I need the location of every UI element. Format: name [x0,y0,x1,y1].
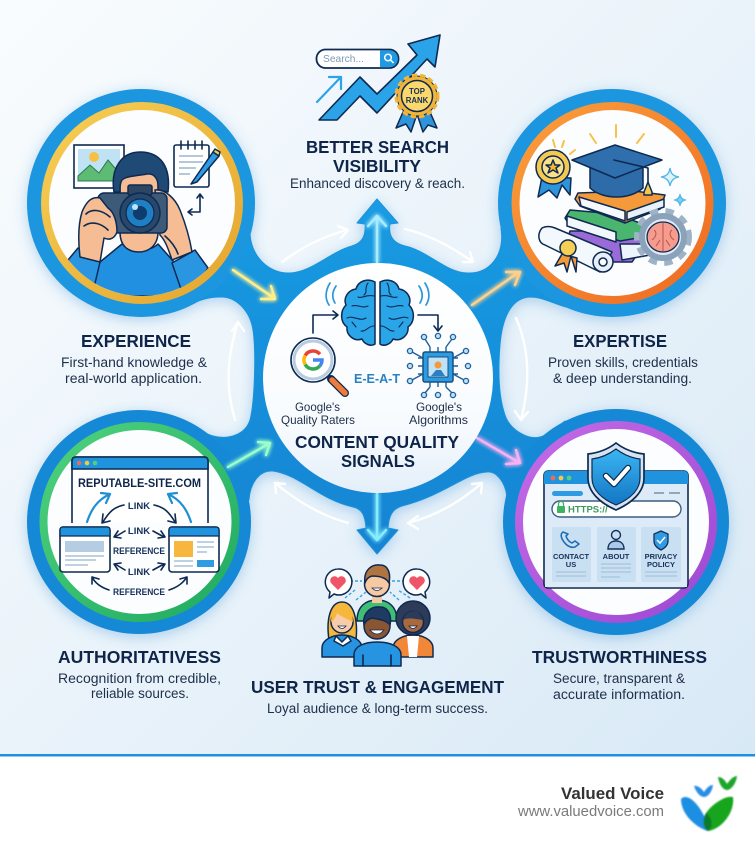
text: experience description: First-hand knowledge & [61,355,207,370]
icon: top rank badge: TOP [409,87,425,96]
icon: privacy card: POLICY [647,560,675,569]
icon: about card [597,527,636,582]
icon: sparkles [661,168,685,205]
text: search description: Enhanced discovery & reach. [290,176,465,191]
heading: content quality signals [295,432,459,471]
text: google's quality raters [281,400,355,427]
panel: central content quality signals [263,263,493,493]
icon: reputable site window: REPUTABLE-SITE.COM [78,478,201,490]
text: link labels: LINK [128,567,150,578]
icon: about card: ABOUT [603,552,630,561]
panel: authoritativeness circle [44,426,236,618]
icon: small window right [169,527,219,572]
icon: algorithm chip [407,333,471,398]
text: link labels: REFERENCE [113,546,165,557]
text: experience description [61,355,207,386]
text: google's algorithms [409,400,468,427]
icon: man front [354,607,401,666]
icon: browser window: HTTPS:// [568,504,608,516]
icon: contact card: CONTACT [553,552,589,561]
text: expertise description: Proven skills, credentials [548,355,698,370]
icon: small window left [60,527,110,572]
heading: better search visibility: BETTER SEARCH [306,137,449,157]
text: link labels: LINK [128,501,150,512]
blue connector hub [27,89,729,635]
arrow: up to search visibility [368,216,386,262]
text: google's quality raters: Quality Raters [281,413,355,427]
icon: privacy card [641,527,681,582]
text: user trust description: Loyal audience & long-term success. [267,701,488,716]
arrow: experience to centre [233,270,275,299]
icon: woman left [322,602,362,657]
icon: user community [322,565,433,666]
text: authoritativeness description: Recognition from credible, [58,671,221,686]
arrow: authority to centre [228,442,270,467]
panel: expertise circle [516,106,710,300]
icon: better search visibility [316,35,440,132]
text: authoritativeness description [58,671,221,701]
text: authoritativeness description: reliable sources. [91,686,189,701]
icon: link arrows [92,505,187,590]
heading: better search visibility: VISIBILITY [333,156,421,176]
icon: heart bubble left [325,569,352,598]
icon: top rank badge [396,75,438,132]
text: trustworthiness description: Secure, transparent & [553,671,685,686]
heading: trustworthiness: TRUSTWORTHINESS [532,647,707,667]
text: experience description: real-world application. [65,371,202,386]
arrow: raters to brain [313,311,338,333]
icon: graduation cap [572,145,662,197]
text: website: www.valuedvoice.com [517,803,664,820]
text: expertise description: & deep understanding. [553,371,692,386]
icon: woman right [393,601,433,657]
icon: landscape picture [74,145,124,188]
icon: gear with brain [638,212,688,262]
icon: reputable site window [72,457,208,523]
panel: white circular arrows between nodes [229,226,528,529]
panel: trustworthiness circle [519,425,713,619]
icon: contact card: US [566,560,576,569]
icon: valued voice logo [681,776,737,831]
arrow: centre to trustworthiness [477,438,520,464]
text: link labels: REFERENCE [113,587,165,598]
icon: notepad and pen [174,141,220,215]
heading: user trust and engagement: USER TRUST & ENGAGEMENT [251,677,504,697]
icon: shield [588,443,644,510]
text: link labels: LINK [128,526,150,537]
icon: medal [536,150,571,198]
heading: experience: EXPERIENCE [81,331,191,351]
icon: man top [357,565,397,621]
heading: content quality signals: CONTENT QUALITY [295,432,459,452]
icon: search bar: Search... [323,53,364,65]
text: trustworthiness description: accurate information. [553,687,685,702]
icon: top rank badge: RANK [406,96,429,105]
icon: connecting dashes [345,581,410,600]
heading: expertise: EXPERTISE [573,331,667,351]
text: expertise description [548,355,698,386]
text: trustworthiness description [553,671,685,702]
icon: browser window [544,471,688,588]
text: google's algorithms: Algorithms [409,413,468,427]
icon: privacy card: PRIVACY [645,552,677,561]
text: google's quality raters: Google's [295,400,340,414]
icon: book stack [565,191,665,262]
panel: experience circle [45,106,239,300]
heading: content quality signals: SIGNALS [341,451,415,471]
icon: photographer [68,152,208,296]
text: google's algorithms: Google's [416,400,462,414]
heading: authoritativeness: AUTHORITATIVESS [58,647,221,667]
icon: sun rays [553,125,644,154]
icon: brain [326,280,429,345]
heading: better search visibility [306,137,449,176]
text: brand name: Valued Voice [561,784,664,803]
icon: magnifier with G [291,338,345,393]
arrow: brain to algorithms [418,315,442,331]
arrow: down to user trust [368,493,386,540]
arrow: small rising arrow [317,77,341,102]
arrow: rising trend [319,35,440,120]
footer [0,754,755,850]
icon: scroll with rosette [539,226,613,272]
arrow: centre to expertise [472,272,520,305]
icon: contact card [552,527,591,582]
text: e-e-a-t: E-E-A-T [354,372,400,386]
text: link labels [113,501,165,598]
icon: heart bubble right [403,569,430,598]
